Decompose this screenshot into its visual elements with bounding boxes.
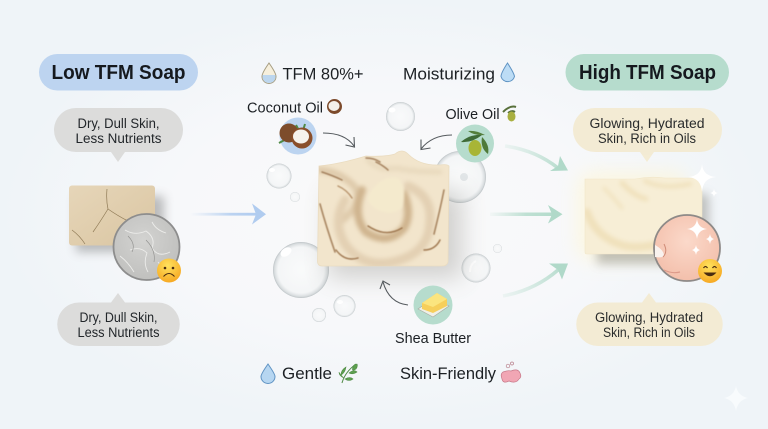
label: Coconut Oil: Coconut Oil xyxy=(247,100,323,116)
callout: bottom low TFM: Dry, Dull Skin, xyxy=(80,310,158,325)
callout: top low TFM: Dry, Dull Skin, xyxy=(78,116,160,131)
icon: blue droplet xyxy=(501,63,514,82)
label: Olive Oil: Olive Oil xyxy=(446,106,500,123)
heading: High TFM Soap xyxy=(566,54,729,90)
soap bar: central swirl xyxy=(318,151,462,278)
decorative sparkle bottom right xyxy=(724,386,748,411)
icon: olive circle xyxy=(456,124,494,162)
panel: low TFM soap xyxy=(39,54,198,346)
bottom labels row xyxy=(261,362,521,384)
icon: half-full droplet xyxy=(262,63,276,84)
icon: coconut circle xyxy=(279,118,316,154)
callout: bottom low TFM xyxy=(57,293,180,346)
ingredient: shea butter xyxy=(380,281,471,347)
soap bar: high TFM xyxy=(577,171,709,264)
icon: smiling face xyxy=(698,259,722,283)
arrow: coconut to soap xyxy=(323,133,354,147)
arrow: top green xyxy=(505,146,568,171)
label: TFM 80%+: TFM 80%+ xyxy=(282,66,364,84)
label: Shea Butter: Shea Butter xyxy=(395,331,471,347)
icon: sparkles on soap xyxy=(688,164,718,197)
icon: sad face xyxy=(157,258,181,282)
arrow: middle green xyxy=(490,205,562,224)
heading: Low TFM Soap xyxy=(39,54,198,90)
callout: bottom high TFM: Glowing, Hydrated xyxy=(595,310,703,325)
heading: High TFM Soap: High TFM Soap xyxy=(579,62,716,84)
callout: bottom high TFM: Skin, Rich in Oils xyxy=(603,325,695,340)
arrow: low to center xyxy=(190,204,266,224)
arrow: olive to soap xyxy=(421,135,452,150)
icon: butter circle xyxy=(414,286,452,324)
callout: top low TFM: Less Nutrients xyxy=(76,131,162,146)
ingredient: olive oil xyxy=(421,106,516,162)
icon: cracked skin magnifier xyxy=(114,214,180,280)
icon: olive small xyxy=(503,107,516,122)
arrows: center to high TFM xyxy=(490,146,568,296)
icon: pink soap xyxy=(501,362,521,382)
arrow: bottom green xyxy=(503,264,568,296)
callout: bottom high TFM xyxy=(576,293,723,346)
arrow: shea to soap xyxy=(380,281,408,305)
callout: bottom low TFM: Less Nutrients xyxy=(78,325,160,340)
label: Gentle: Gentle xyxy=(282,365,332,383)
soap bar: low TFM xyxy=(69,186,164,252)
label: Skin-Friendly: Skin-Friendly xyxy=(400,365,497,383)
callout: top high TFM: Glowing, Hydrated xyxy=(590,116,704,131)
panel: central soap and ingredients xyxy=(247,63,521,384)
icon: coconut small xyxy=(327,99,342,114)
heading: Low TFM Soap: Low TFM Soap xyxy=(52,62,186,84)
panel: high TFM soap xyxy=(566,54,729,346)
water droplets xyxy=(266,102,502,322)
callout: top high TFM: Skin, Rich in Oils xyxy=(598,131,696,146)
label: Moisturizing: Moisturizing xyxy=(403,66,495,84)
icon: blue droplet gentle xyxy=(261,364,275,384)
ingredient: coconut oil xyxy=(247,99,354,154)
icon: green leaves xyxy=(339,364,357,383)
callout: top low TFM xyxy=(54,108,183,162)
icon: glowing skin magnifier xyxy=(654,215,720,281)
callout: top high TFM xyxy=(573,108,722,162)
top labels row xyxy=(262,63,514,84)
